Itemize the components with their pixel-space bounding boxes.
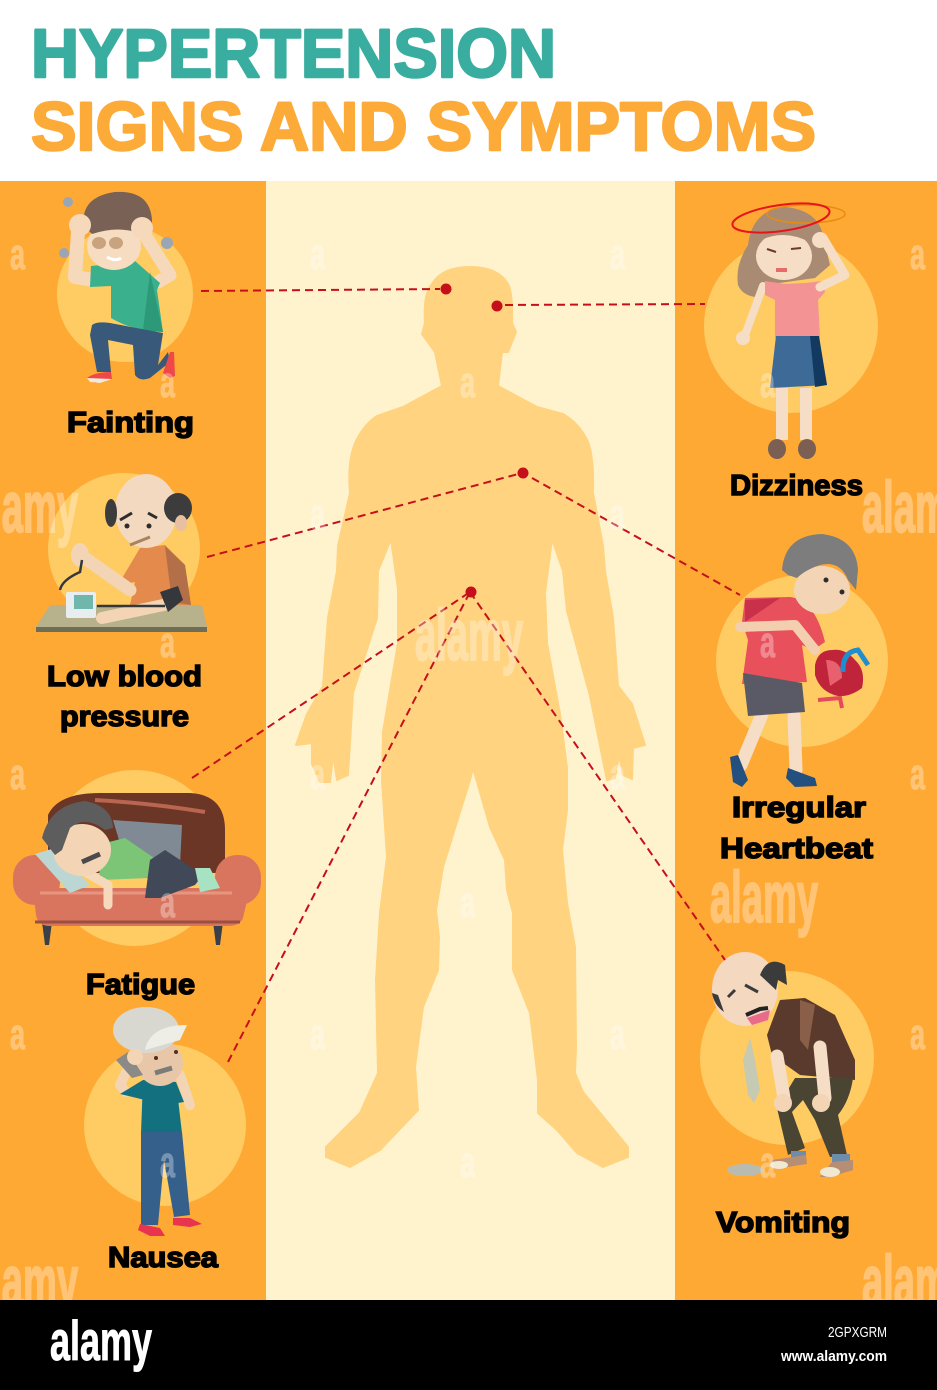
watermarks	[0, 230, 937, 1322]
illustration: fainting man	[59, 192, 175, 383]
title: SIGNS AND SYMPTOMS	[31, 88, 816, 165]
watermarks: a	[160, 1138, 175, 1187]
label: Fatigue: Fatigue	[86, 969, 195, 1001]
panel: centre cream column	[266, 181, 675, 1300]
footer bar	[0, 1300, 937, 1390]
body silhouette	[296, 267, 645, 1167]
label: Irregular Heartbeat	[720, 792, 873, 865]
illustration: man vomiting	[712, 952, 855, 1177]
watermarks: alamy	[415, 596, 523, 676]
watermarks: a	[760, 358, 775, 407]
watermarks: a	[760, 618, 775, 667]
watermarks: a	[310, 750, 325, 799]
label: Dizziness: Dizziness	[730, 470, 863, 502]
label: Low blood pressure: Low blood	[47, 661, 202, 693]
label: Nausea: Nausea	[108, 1242, 219, 1274]
circle backgrounds	[47, 226, 888, 1206]
illustration: man with irregular heartbeat	[730, 534, 868, 787]
watermarks: a	[460, 1138, 475, 1187]
watermarks: a	[10, 750, 25, 799]
watermarks: alamy	[710, 858, 818, 938]
watermarks: a	[310, 490, 325, 539]
watermarks: a	[310, 230, 325, 279]
watermarks: a	[610, 230, 625, 279]
watermarks: a	[160, 358, 175, 407]
footer image id: 2GPXGRM	[828, 1324, 887, 1341]
illustration: dizzy girl	[731, 198, 845, 459]
illustration: man with cap and nausea	[113, 1007, 202, 1236]
watermarks: a	[910, 750, 925, 799]
watermarks: a	[310, 1010, 325, 1059]
title: HYPERTENSION	[31, 15, 556, 92]
watermarks: a	[160, 878, 175, 927]
watermarks: a	[760, 1138, 775, 1187]
label: Low blood pressure: pressure	[60, 701, 189, 733]
watermarks: a	[160, 618, 175, 667]
panel: left orange column	[0, 181, 266, 1300]
title	[31, 15, 816, 165]
label: Vomiting: Vomiting	[716, 1207, 850, 1239]
label: Irregular Heartbeat: Irregular	[732, 792, 866, 824]
connector lines	[192, 289, 740, 1062]
illustration: man asleep on sofa	[13, 793, 261, 945]
watermarks: a	[10, 1010, 25, 1059]
watermarks: a	[10, 230, 25, 279]
label: Fainting: Fainting	[67, 407, 194, 439]
label: Irregular Heartbeat: Heartbeat	[720, 833, 873, 865]
watermarks: a	[910, 230, 925, 279]
watermarks: a	[910, 1010, 925, 1059]
label: Low blood pressure	[47, 661, 202, 733]
footer website: www.alamy.com	[780, 1348, 887, 1365]
illustration: man measuring blood pressure	[36, 474, 207, 632]
watermarks: a	[610, 490, 625, 539]
watermarks: a	[610, 750, 625, 799]
watermarks: a	[460, 878, 475, 927]
symptom points on body	[440, 284, 528, 598]
watermarks: a	[610, 1010, 625, 1059]
footer logo: alamy	[50, 1309, 152, 1372]
watermarks: a	[460, 358, 475, 407]
panel: right orange column	[675, 181, 937, 1300]
